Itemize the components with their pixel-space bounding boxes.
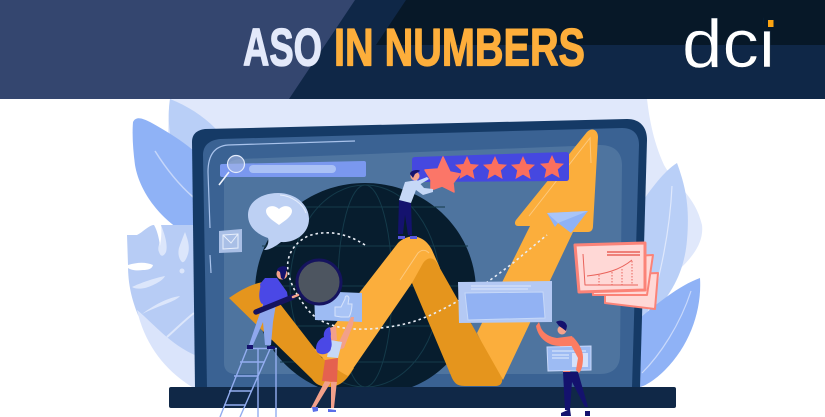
dashed flight path xyxy=(288,233,547,329)
content card xyxy=(458,281,552,323)
icon: stars xyxy=(425,155,564,192)
title: ASO xyxy=(243,18,322,78)
title xyxy=(243,18,585,78)
background blob and leaves xyxy=(127,99,702,387)
search bar xyxy=(219,156,366,185)
header banner xyxy=(0,0,825,99)
growth arrow xyxy=(229,130,598,387)
rating stars bar xyxy=(412,152,569,192)
person with magnifier on ladder xyxy=(247,266,298,349)
icon: thumbs up xyxy=(335,296,352,317)
logo: dci: dci xyxy=(682,6,775,82)
icon: envelope card xyxy=(219,229,242,253)
laptop xyxy=(192,119,647,388)
globe xyxy=(255,183,476,387)
magnifying glass lens xyxy=(297,260,341,304)
chart cards xyxy=(575,243,658,309)
person: woman reaching up xyxy=(311,317,354,412)
monstera leaf xyxy=(127,225,196,357)
icon: search magnifier xyxy=(219,156,244,185)
paper plane xyxy=(547,211,588,233)
ladder xyxy=(220,348,277,417)
magnifier handle xyxy=(256,297,293,312)
person on arrow placing star xyxy=(398,170,433,239)
icon: speech bubble with heart xyxy=(248,193,309,250)
thumbs-up card xyxy=(314,291,362,322)
title: IN NUMBERS xyxy=(334,18,585,78)
laptop base xyxy=(169,387,676,408)
line chart xyxy=(583,252,640,285)
person holding card xyxy=(536,321,591,416)
